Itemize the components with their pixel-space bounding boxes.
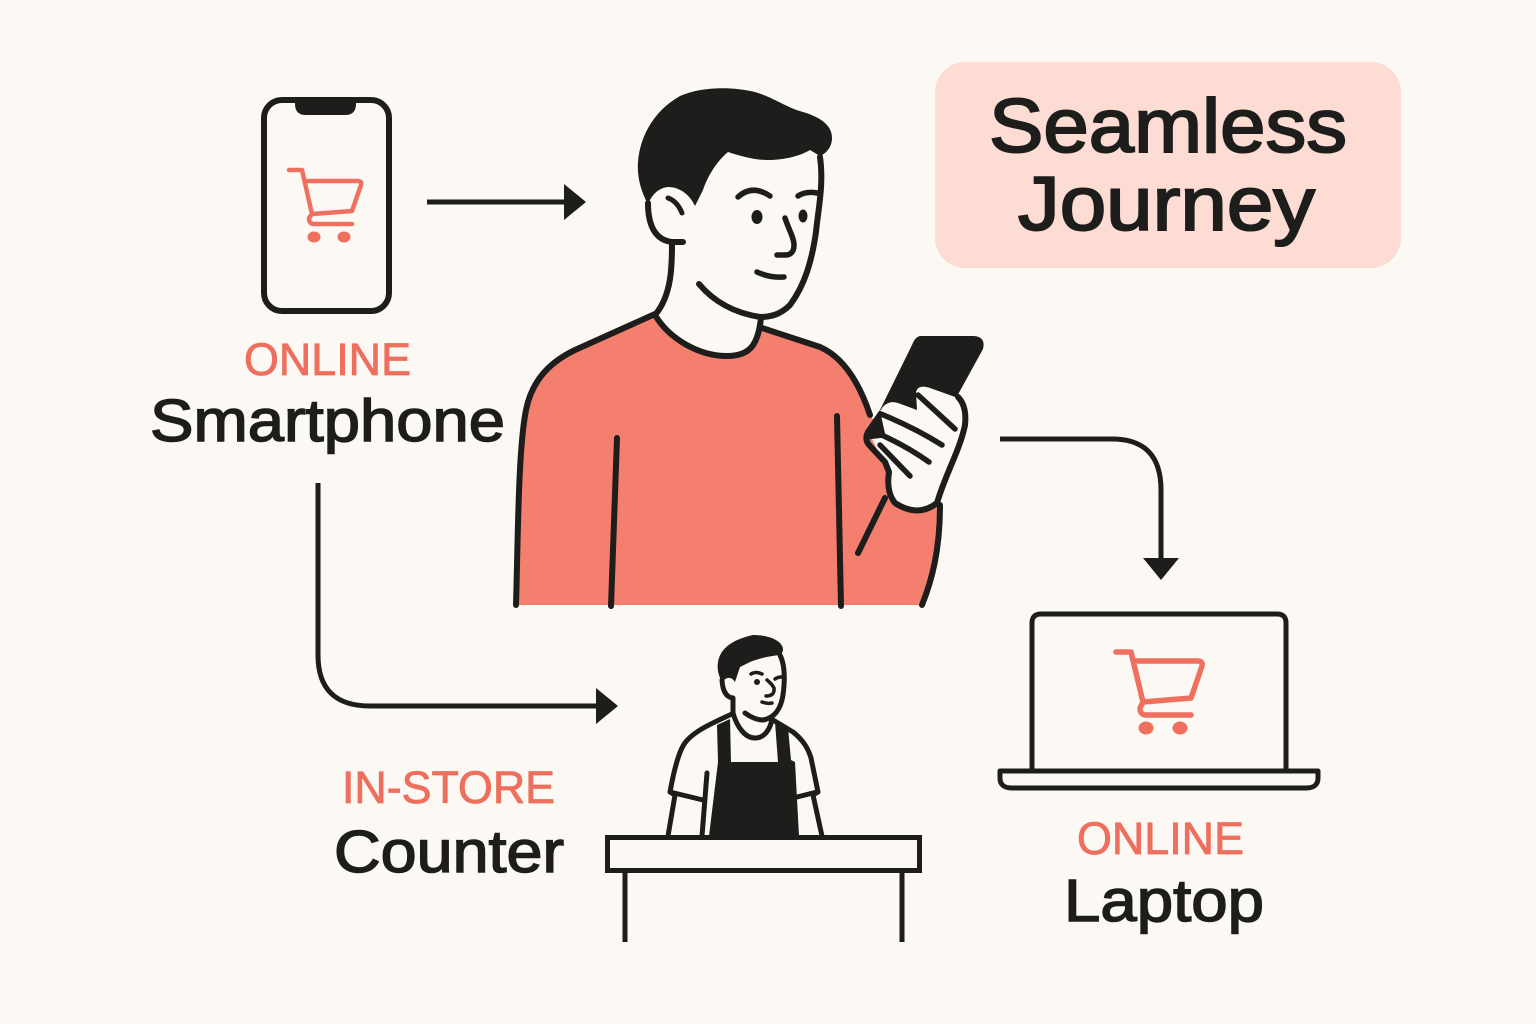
- hair: [638, 88, 832, 206]
- apron: [709, 719, 799, 836]
- label: ONLINE Smartphone: Smartphone: [150, 388, 505, 454]
- label: ONLINE Laptop: [1064, 813, 1264, 934]
- label: ONLINE Smartphone: ONLINE: [244, 334, 411, 385]
- label: ONLINE Laptop: Laptop: [1064, 868, 1264, 934]
- label: ONLINE Smartphone: [150, 334, 505, 454]
- label: IN-STORE Counter: [334, 762, 564, 885]
- icon: laptop with cart: [1000, 614, 1318, 788]
- face details: [738, 190, 817, 197]
- label: IN-STORE Counter: Counter: [334, 819, 564, 885]
- arrow: smartphone to counter: [318, 483, 618, 724]
- icon: smartphone with cart: [264, 100, 389, 311]
- title badge: Seamless Journey: Seamless: [989, 84, 1347, 169]
- torso: [516, 315, 940, 605]
- label: IN-STORE Counter: IN-STORE: [342, 762, 555, 813]
- title badge: Seamless Journey: Journey: [1018, 162, 1315, 247]
- title badge: Seamless Journey: [935, 62, 1401, 268]
- label: ONLINE Laptop: ONLINE: [1077, 813, 1244, 864]
- illustration: person using phone: [516, 88, 984, 606]
- arms and shoulders: [668, 714, 822, 836]
- illustration: shop worker at counter: [608, 635, 920, 942]
- head and collar: [725, 650, 785, 738]
- phone in hand: [880, 336, 984, 420]
- arrow: person to laptop: [1000, 439, 1179, 580]
- neck and face: [655, 150, 821, 356]
- counter: [608, 838, 920, 870]
- hand: [870, 387, 965, 510]
- arrow: smartphone to person: [427, 184, 586, 220]
- ear: [648, 203, 683, 242]
